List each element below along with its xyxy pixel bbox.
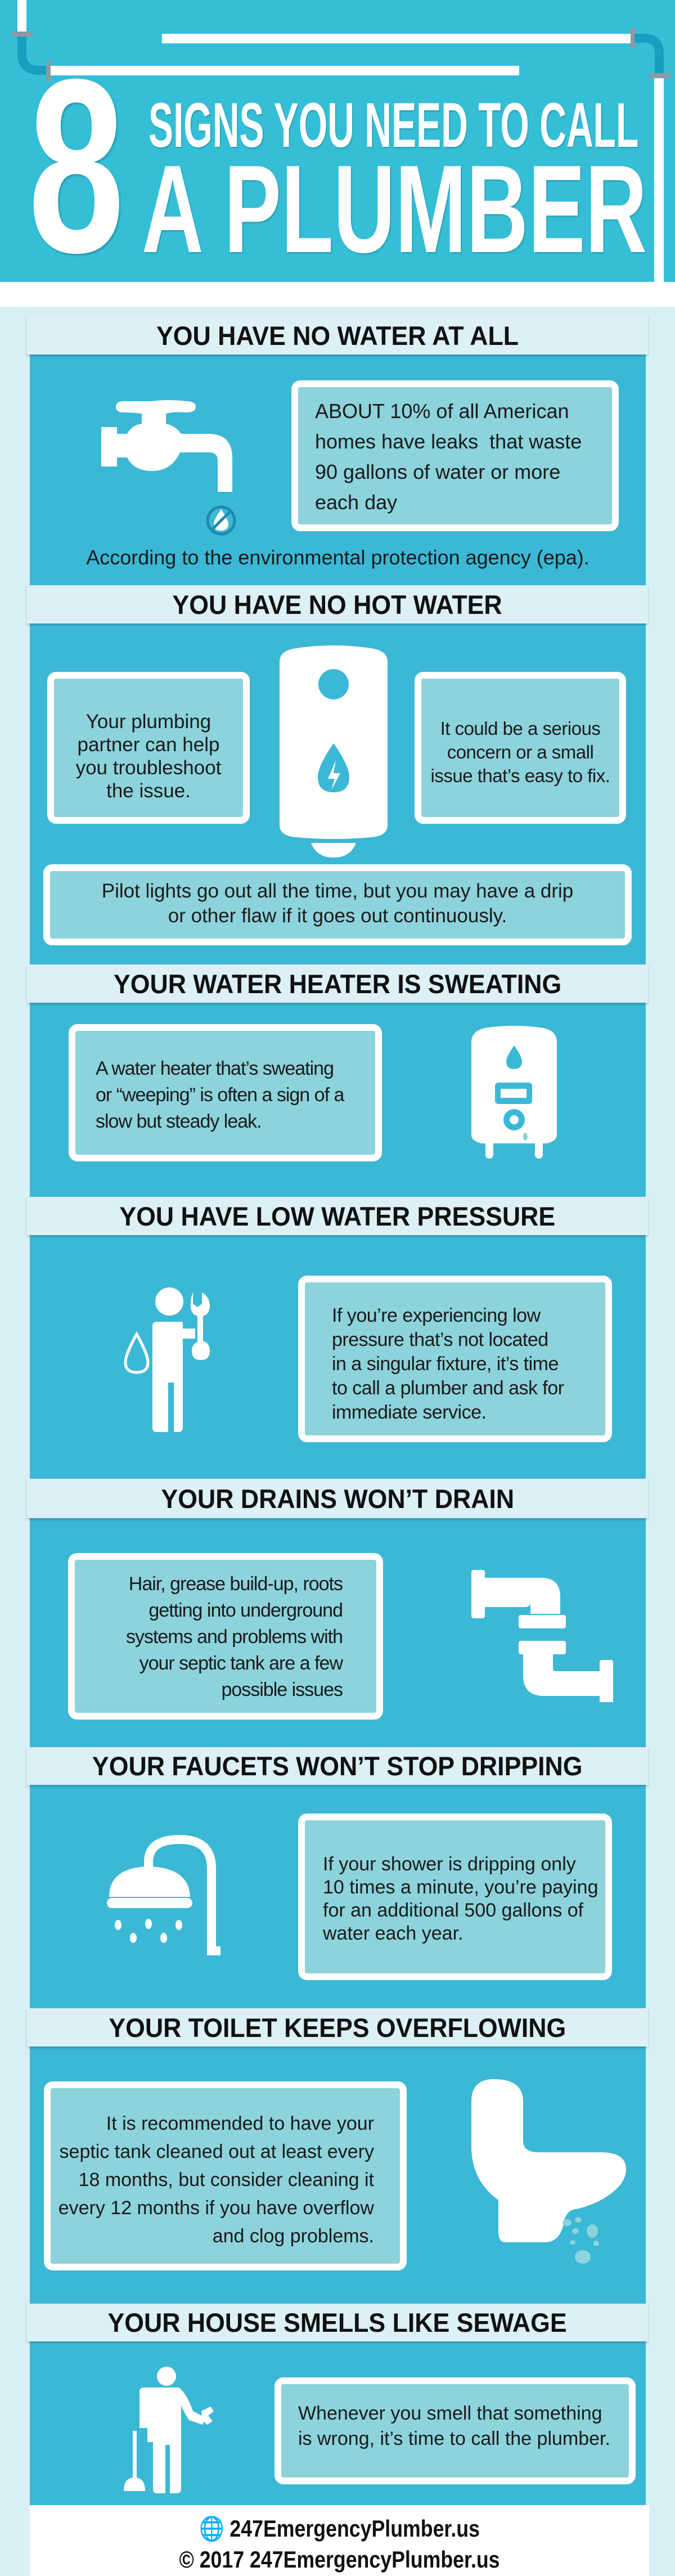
callout: drain causes: Hair, grease build-up, roots <box>129 1573 343 1595</box>
heading 1 <box>27 316 648 354</box>
callout: low pressure: to call a plumber and ask for <box>332 1377 564 1399</box>
heading 5 <box>27 1479 648 1518</box>
callout: drain causes: systems and problems with <box>126 1626 343 1648</box>
callout: low pressure: in a singular fixture, it’s time <box>332 1353 559 1375</box>
heading 4 <box>27 1197 648 1235</box>
callout: pilot lights <box>43 864 632 945</box>
footer: © 2017 247EmergencyPlumber.us <box>179 2546 500 2573</box>
callout: sweating: A water heater that’s sweating <box>96 1058 334 1079</box>
heading 7: YOUR TOILET KEEPS OVERFLOWING <box>109 2012 566 2043</box>
heading 3 <box>27 964 648 1003</box>
panel: dripping faucets <box>30 1785 646 2008</box>
callout: shower stat: If your shower is dripping only <box>323 1854 576 1875</box>
callout: drain causes <box>68 1553 383 1720</box>
callout: troubleshoot: the issue. <box>106 780 191 802</box>
heading 2: YOU HAVE NO HOT WATER <box>173 590 502 619</box>
callout: leak statistic: 90 gallons of water or more <box>315 460 560 483</box>
callout: pilot lights: Pilot lights go out all the time, but you may have a drip <box>102 880 573 902</box>
footer: 🌐 247EmergencyPlumber.us <box>199 2515 480 2542</box>
footer <box>30 2505 649 2576</box>
callout: troubleshoot <box>47 672 250 824</box>
callout: shower stat: 10 times a minute, you’re paying <box>323 1877 598 1898</box>
callout: serious concern: concern or a small <box>447 742 593 762</box>
callout: septic tank: septic tank cleaned out at least every <box>60 2141 374 2162</box>
title line 2: A PLUMBER <box>142 140 647 279</box>
decorative pipes <box>11 0 670 282</box>
icon: water heater <box>280 645 388 858</box>
panel: sewage smell <box>30 2341 646 2505</box>
title banner <box>0 0 675 282</box>
callout: serious concern: It could be a serious <box>440 718 600 739</box>
heading 3: YOUR WATER HEATER IS SWEATING <box>114 969 561 998</box>
callout: troubleshoot: partner can help <box>78 734 219 756</box>
icon: drain pipes <box>471 1570 613 1702</box>
panel: drains <box>30 1518 646 1747</box>
callout: low pressure: pressure that’s not located <box>332 1329 548 1350</box>
heading 8: YOUR HOUSE SMELLS LIKE SEWAGE <box>108 2308 567 2337</box>
heading 1: YOU HAVE NO WATER AT ALL <box>156 321 519 350</box>
callout: shower stat: for an additional 500 gallons of <box>323 1900 583 1921</box>
icon: small water heater <box>471 1026 557 1159</box>
callout: serious concern: issue that’s easy to fix. <box>431 765 610 786</box>
callout: troubleshoot: you troubleshoot <box>76 757 221 779</box>
callout: pilot lights: or other flaw if it goes out continuously. <box>168 905 507 927</box>
heading 8 <box>27 2304 648 2341</box>
panel: no hot water <box>30 623 646 964</box>
callout: low pressure <box>298 1276 612 1442</box>
callout: leak statistic: homes have leaks that waste <box>315 430 582 453</box>
callout: leak statistic: ABOUT 10% of all American <box>315 400 569 423</box>
callout: septic tank <box>44 2081 407 2270</box>
callout: septic tank: 18 months, but consider cleaning it <box>79 2169 374 2191</box>
panel: no water <box>30 354 646 585</box>
callout: drain causes: getting into underground <box>148 1600 343 1621</box>
callout: smell <box>274 2377 636 2484</box>
callout: leak statistic: each day <box>315 491 397 514</box>
callout: shower stat <box>298 1814 612 1980</box>
callout: septic tank: It is recommended to have your <box>106 2113 374 2134</box>
panel: water heater sweating <box>30 1003 646 1197</box>
heading 6 <box>27 1747 648 1785</box>
heading 2 <box>27 585 648 623</box>
title line 1: SIGNS YOU NEED TO CALL <box>148 90 638 160</box>
callout: low pressure: If you’re experiencing low <box>332 1305 541 1326</box>
panel: low pressure <box>30 1235 646 1479</box>
callout: shower stat: water each year. <box>323 1923 463 1944</box>
callout: troubleshoot: Your plumbing <box>86 711 211 733</box>
callout: low pressure: immediate service. <box>332 1402 486 1423</box>
callout: septic tank: and clog problems. <box>213 2225 374 2247</box>
callout: leak statistic <box>291 380 619 531</box>
icon: faucet <box>101 400 236 536</box>
icon: toilet <box>471 2079 626 2264</box>
heading 6: YOUR FAUCETS WON’T STOP DRIPPING <box>92 1751 583 1781</box>
heading 7 <box>27 2008 648 2047</box>
callout: smell: is wrong, it’s time to call the plumber. <box>298 2428 610 2449</box>
text: source note: According to the environmental protection agency (epa). <box>86 546 590 569</box>
callout: septic tank: every 12 months if you have overflow <box>58 2197 374 2219</box>
heading 4: YOU HAVE LOW WATER PRESSURE <box>120 1201 555 1231</box>
callout: sweating: or “weeping” is often a sign of a <box>96 1084 344 1106</box>
callout: serious concern <box>415 672 626 824</box>
callout: drain causes: your septic tank are a few <box>140 1653 343 1674</box>
icon: plumber with plunger <box>124 2367 214 2493</box>
callout: smell: Whenever you smell that something <box>298 2403 602 2424</box>
heading 5: YOUR DRAINS WON’T DRAIN <box>161 1483 514 1514</box>
icon: shower head <box>107 1835 220 1955</box>
icon: plumber with wrench and drop <box>124 1287 210 1432</box>
callout: drain causes: possible issues <box>221 1679 343 1700</box>
callout: sweating <box>69 1024 382 1161</box>
panel: toilet overflowing <box>30 2047 646 2304</box>
callout: sweating: slow but steady leak. <box>96 1111 262 1132</box>
